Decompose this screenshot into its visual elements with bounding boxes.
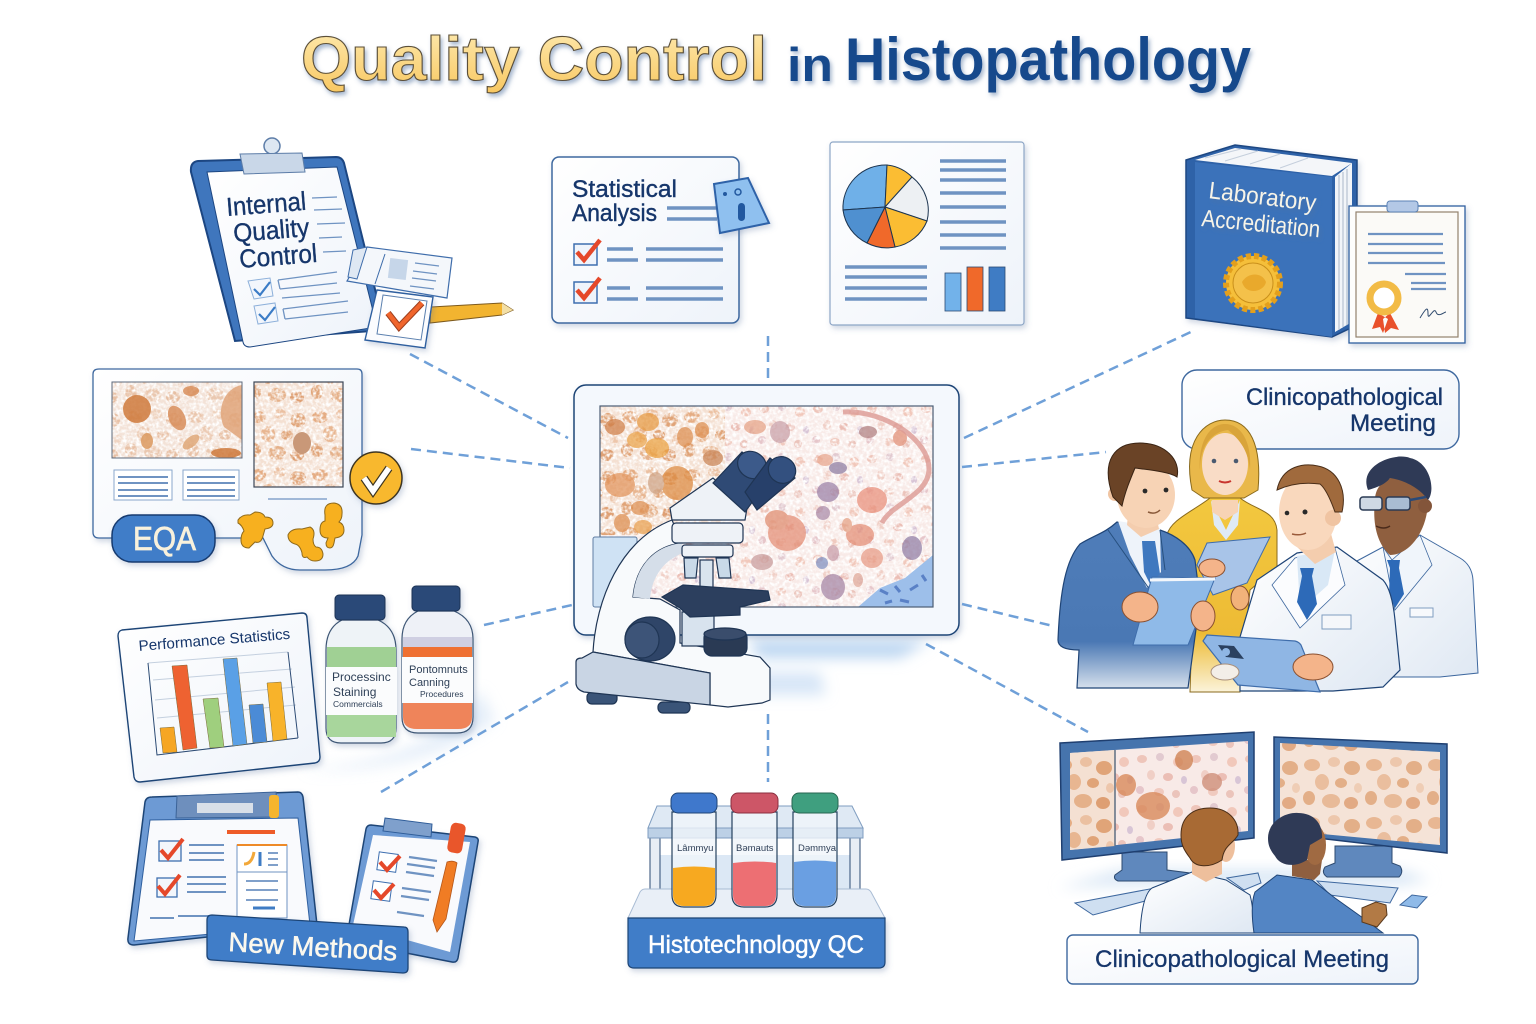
icon: microscope [576, 446, 801, 713]
icon: book [1186, 145, 1357, 337]
icon: pencil [430, 303, 513, 323]
title: in [787, 38, 833, 91]
blue wash [300, 690, 495, 770]
panel: central monitor and microscope [574, 385, 959, 713]
label box: clinicopathological meeting: Meeting [1350, 410, 1436, 437]
condenser knob [704, 628, 747, 656]
icon: reagent bottle green: Processinc [332, 670, 391, 684]
figure: man at right [1340, 457, 1478, 677]
icon: certificate [1349, 201, 1465, 343]
icon: monitor right [1274, 737, 1447, 877]
image: tissue slide right [254, 382, 343, 487]
panel: clinicopathological meeting team [1058, 370, 1478, 692]
panel: statistical analysis [552, 157, 769, 323]
base top [628, 889, 885, 918]
text: performance statistics: Performance Statistics [138, 626, 291, 655]
blue wash shadows [740, 640, 930, 695]
panel: clinicopathological meeting workstation [1058, 732, 1447, 984]
icon: reagent bottle green: Staining [333, 685, 376, 699]
icon: large clipboard [128, 792, 317, 945]
panel: performance statistics [118, 586, 495, 782]
label box: clinicopathological meeting [1067, 935, 1418, 984]
icon: vial blue [792, 793, 838, 907]
text: internal quality control: Quality [232, 212, 310, 248]
panel: new methods [128, 792, 478, 973]
text: internal quality control: Internal [225, 186, 307, 222]
microscope body [593, 520, 770, 707]
pie chart [843, 165, 928, 248]
icon: clipboard held by blue-suit man [1122, 559, 1249, 645]
eyepiece left [713, 446, 772, 512]
text: laboratory accreditation: Laboratory [1207, 177, 1318, 217]
icon: clipboard clip [240, 138, 305, 174]
rack back [650, 838, 860, 907]
icon: woman's tablet [1197, 537, 1270, 595]
panel: EQA [93, 369, 402, 570]
panel: internal quality control clipboard [191, 138, 513, 348]
badge: histotechnology QC: Histotechnology QC [648, 931, 864, 959]
arm inner shade [633, 543, 683, 599]
icon: reagent bottle orange: Pontomnuts [409, 664, 468, 676]
stage [662, 585, 770, 617]
icon: gold seal [1226, 256, 1280, 310]
text boxes [114, 470, 239, 500]
text: laboratory accreditation: Accreditation [1200, 205, 1321, 243]
badge: histotechnology QC [628, 918, 885, 968]
blue wash [1058, 870, 1430, 888]
coarse focus knob [625, 617, 675, 661]
icon: reagent bottle orange: Canning [409, 677, 450, 689]
badge: EQA [112, 515, 215, 562]
small blue device behind microscope [593, 537, 637, 607]
base left block [576, 652, 710, 705]
icon: clipboard paper [207, 167, 377, 347]
panel: pie chart report [830, 142, 1024, 325]
badge: new methods [207, 915, 408, 973]
feet [587, 692, 690, 713]
icon: tablet held by white-coat man [1203, 635, 1333, 692]
bar chart [945, 267, 1005, 311]
label box: clinicopathological meeting [1182, 370, 1459, 449]
icon: reagent bottle green: Commercials [333, 699, 383, 709]
figure: viewer left [1140, 808, 1254, 933]
icon: check card [365, 290, 433, 348]
badge: new methods: New Methods [228, 927, 398, 967]
nosepiece [672, 523, 743, 590]
text: internal quality control [225, 186, 318, 274]
label box: clinicopathological meeting: Clinicopathological [1246, 384, 1443, 411]
text: statistical analysis [572, 176, 677, 227]
icon: clipboard board [191, 157, 385, 341]
icons: red checkboxes [574, 240, 600, 303]
icon: vial red [731, 793, 778, 907]
panel: laboratory accreditation [1186, 145, 1465, 343]
figure: viewer right [1252, 813, 1387, 933]
icon: gold check badge [350, 452, 402, 504]
icon: reagent bottle green [326, 595, 397, 743]
vial labels: Bəmauts [736, 843, 774, 854]
text: laboratory accreditation [1200, 177, 1321, 243]
image: tissue on screen [600, 406, 933, 607]
rack shelf [648, 806, 863, 838]
vial labels: Lâmmyu [677, 843, 713, 854]
clipboard clip [176, 792, 279, 818]
red checkboxes [157, 839, 183, 897]
light column [682, 612, 714, 646]
icon: keyboards and mouse [1075, 873, 1427, 915]
label box: clinicopathological meeting: Clinicopathological Meeting [1095, 946, 1389, 973]
icon: reagent bottle orange: Procedures [420, 689, 463, 699]
icon: blue checkboxes [248, 278, 278, 324]
icon: calculator tag [714, 178, 769, 233]
image: tissue slide left [112, 382, 242, 458]
figure: woman in yellow [1167, 420, 1277, 692]
bar chart [160, 658, 287, 753]
icon: orange tissue pieces [238, 503, 344, 561]
text: internal quality control: Control [238, 238, 318, 274]
connector lines [381, 331, 1193, 792]
figure: man in blue suit [1058, 443, 1200, 688]
head [670, 478, 747, 520]
panel: histotechnology QC [628, 793, 885, 968]
text: statistical analysis: Statistical [572, 176, 677, 203]
title: Histopathology [845, 26, 1252, 93]
icon: monitor [574, 385, 959, 635]
title [301, 25, 1252, 94]
eyepiece right [745, 451, 801, 510]
text: statistical analysis: Analysis [572, 200, 657, 227]
title: Quality Control [301, 25, 767, 94]
inner document [237, 845, 287, 918]
icon: vial yellow [671, 793, 717, 907]
icon: monitor left [1060, 732, 1254, 881]
vial labels: Dəmmya [798, 843, 837, 854]
figure: man in white coat [1240, 465, 1400, 691]
icon: small clipboard with pencil [347, 818, 478, 962]
icon: small papers [347, 247, 452, 298]
card [118, 613, 320, 782]
icon: reagent bottle orange [402, 586, 473, 733]
badge: EQA: EQA [133, 520, 196, 557]
